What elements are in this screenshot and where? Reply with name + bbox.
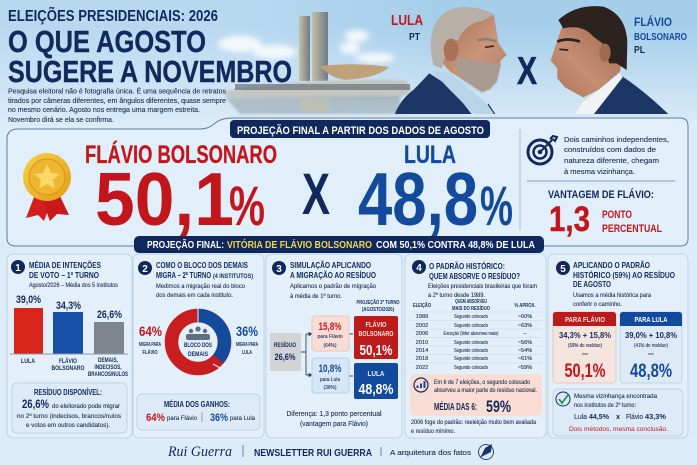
description: conferir o caminho. <box>573 301 622 308</box>
description: Usamos a média histórica para <box>573 292 651 299</box>
label: 64% to Flávio: FLÁVIO <box>142 349 158 356</box>
callout: average gains: 64% <box>146 412 165 424</box>
text: two paths: Dois caminhos independentes, <box>564 135 669 144</box>
label: 36% to Lula: MIGRA PARA <box>236 342 258 348</box>
icon: target <box>528 136 557 164</box>
callout: same neighbourhood <box>553 389 683 436</box>
card: para Lula <box>620 312 682 383</box>
intro text: Pesquisa eleitoral não é fotografia única. É uma sequência de retratos <box>8 86 226 96</box>
callout: available residual <box>12 383 127 433</box>
callout: six of seven: absorveu a maior parte do resíduo nacional. <box>434 387 537 394</box>
table: Segundo colocado <box>454 365 488 371</box>
result: Lula: LULA <box>404 141 456 169</box>
callout: same neighbourhood: 43,3% <box>645 412 666 421</box>
callout: available residual: e votos em outros candidatos). <box>26 422 110 429</box>
badge 4: 4 <box>416 263 422 274</box>
callout: same neighbourhood: Lula <box>574 412 588 421</box>
advantage: PONTO <box>602 209 632 221</box>
table: 1989 <box>416 314 428 320</box>
arrows <box>301 332 353 376</box>
callout: available residual: do eleitorado pode migrar <box>52 403 121 410</box>
footer: A arquitetura dos fatos <box>390 448 471 457</box>
badge 3: 3 <box>276 264 282 275</box>
footer: Rui Guerra <box>167 444 232 460</box>
intro text <box>8 86 226 124</box>
label: 36% to Lula: LULA <box>242 350 252 356</box>
table: ~59% <box>518 365 532 371</box>
banner: final projection: VITÓRIA DE FLÁVIO BOLSONARO <box>227 238 372 251</box>
box: Flávio result: FLÁVIO <box>366 320 387 329</box>
heading: DE VOTO – 1º TURNO <box>29 270 99 280</box>
callout: available residual: RESÍDUO DISPONÍVEL: <box>34 388 102 397</box>
callout: same neighbourhood: nos institutos de 2º turno: <box>574 402 636 409</box>
table <box>411 299 543 371</box>
box: Flávio result <box>354 316 398 359</box>
box: 15,8% to Flávio: 15,8% <box>318 321 342 333</box>
heading <box>290 260 376 280</box>
box: 15,8% to Flávio: para Flávio <box>318 334 342 340</box>
box: 10,8% to Lula: 10,8% <box>318 363 342 375</box>
result: Flávio Bolsonaro: 50,1 <box>95 157 234 241</box>
callout: same neighbourhood: 44,5% <box>589 412 609 421</box>
heading: A MIGRAÇÃO AO RESÍDUO <box>290 269 376 280</box>
heading: SIMULAÇÃO APLICANDO <box>290 260 371 270</box>
card: para Flávio: (59% do resíduo) <box>568 343 602 349</box>
description <box>428 283 537 299</box>
card: para Lula: PARA LULA <box>634 315 668 324</box>
donut chart: BLOCO DOS <box>184 342 212 349</box>
box: Lula result: LULA <box>368 369 385 378</box>
card: para Flávio: 34,3% + 15,8% <box>559 331 612 340</box>
donut chart: DEMAIS <box>188 351 209 358</box>
callout: six of seven <box>410 374 542 416</box>
label: Lula PT: LULA <box>391 12 423 29</box>
table: 2002 <box>416 323 428 329</box>
heading: MÉDIA DE INTENÇÕES <box>29 259 101 270</box>
description <box>573 292 651 308</box>
heading: COMO O BLOCO DOS DEMAIS <box>156 260 248 270</box>
table: ELEIÇÃO <box>413 302 431 309</box>
badge 1: 1 <box>15 263 21 274</box>
table: 2014 <box>416 348 428 354</box>
bar chart: 26,6% <box>97 309 122 321</box>
callout: same neighbourhood: x <box>616 412 621 421</box>
bar chart: 39,0% <box>16 294 41 306</box>
callout: six of seven: Em 6 de 7 eleições, o segundo colocado <box>434 379 530 386</box>
box: 10,8% to Lula: para Lula <box>320 377 341 383</box>
heading: APLICANDO O PADRÃO <box>573 260 650 270</box>
table: ~60% <box>518 314 532 320</box>
box: 15,8% to Flávio <box>312 316 349 351</box>
portrait: Flávio Bolsonaro <box>551 6 668 114</box>
title kicker: ELEIÇÕES PRESIDENCIAIS: 2026 <box>8 7 218 25</box>
intro text: no mesmo cenário. Agosto nos entrega uma margem estreita. <box>8 105 200 114</box>
heading <box>29 259 101 280</box>
badge 2: 2 <box>142 264 148 275</box>
card: para Flávio: 50,1% <box>564 361 606 382</box>
note: 2006 <box>411 419 536 435</box>
callout: same neighbourhood: Dois métodos, mesma conclusão. <box>569 426 668 433</box>
advantage <box>548 188 662 239</box>
column label: (AGOSTO/2026) <box>362 307 394 313</box>
bar chart: DEMAIS, <box>98 358 118 364</box>
advantage: VANTAGEM DE FLÁVIO: <box>548 188 654 201</box>
table: QUEM ABSORVEU <box>455 299 487 305</box>
table: MAIS DO RESÍDUO <box>452 304 490 312</box>
label: Flávio Bolsonaro PL: PL <box>634 45 645 56</box>
panel 2: block migration <box>133 254 264 438</box>
result: Flávio Bolsonaro: FLÁVIO BOLSONARO <box>85 140 277 169</box>
icon: gold medal <box>23 153 71 221</box>
description: Medimos a migração real do bloco <box>156 283 245 290</box>
description: Eleições presidenciais brasileiras que foram <box>428 283 537 290</box>
bar chart: BRANCOS/NULOS <box>88 372 128 378</box>
heading: O PADRÃO HISTÓRICO: <box>429 260 505 271</box>
label: 64% to Flávio <box>139 323 162 356</box>
table: – <box>523 331 527 337</box>
label: 64% to Flávio: 64% <box>139 323 162 339</box>
description <box>290 283 376 300</box>
heading: HISTÓRICO (59%) AO RESÍDUO <box>573 269 675 280</box>
column label: PROJEÇÃO 2º TURNO <box>356 299 400 306</box>
callout: same neighbourhood: Mesma vizinhança encontrada <box>574 393 657 400</box>
table: % APROX. <box>514 303 536 309</box>
badge 1 <box>11 260 25 274</box>
callout: average gains <box>137 394 260 430</box>
panel 1: first-round average <box>7 254 132 438</box>
bar chart: 34,3% <box>56 300 81 312</box>
difference note: (vantagem para Flávio) <box>300 421 368 428</box>
box: residual <box>270 333 301 371</box>
banner: final projection: COM 50,1% CONTRA 48,8% DE LULA <box>376 239 535 251</box>
versus X: X <box>302 162 330 227</box>
versus X: X <box>517 50 537 93</box>
advantage: PERCENTUAL <box>602 223 662 235</box>
callout: average gains: para Lula <box>230 415 255 422</box>
table: Segundo colocado <box>454 323 488 329</box>
badge 2 <box>138 261 152 275</box>
table: 2010 <box>416 340 428 346</box>
result: Flávio Bolsonaro: % <box>229 174 265 237</box>
badge 4 <box>412 260 426 274</box>
label: 36% to Lula: 36% <box>236 323 258 339</box>
description: dos demais em cada instituto. <box>156 292 233 299</box>
callout: average gains: MÉDIA DOS GANHOS: <box>164 400 230 409</box>
table: Segundo colocado <box>454 348 488 354</box>
box: Flávio result: BOLSONARO <box>358 329 394 338</box>
table: 2018 <box>416 356 428 362</box>
card: para Lula: 39,0% + 10,8% <box>625 331 678 340</box>
box: Lula result: 48,8% <box>358 381 394 398</box>
table: Segundo colocado <box>454 314 488 320</box>
banner: final projection <box>134 236 544 253</box>
callout: same neighbourhood: Flávio <box>626 412 643 421</box>
title: O QUE AGOSTO <box>8 24 206 59</box>
description: Aplicamos o padrão de migração <box>290 283 376 290</box>
badge 3 <box>272 261 286 275</box>
advantage: 1,3 <box>549 200 590 239</box>
card: para Lula: (41% do resíduo) <box>634 343 668 349</box>
panel 5: applying historical pattern <box>548 254 688 438</box>
heading: DE AGOSTO <box>573 279 611 289</box>
footer: NEWSLETTER RUI GUERRA <box>254 447 372 459</box>
text: two paths: construídos com dados de <box>564 145 656 154</box>
heading <box>573 260 675 289</box>
table: ~56% <box>518 340 532 346</box>
text: two paths: à mesma vizinhança. <box>564 167 635 176</box>
table: Segundo colocado <box>454 340 488 346</box>
box: 10,8% to Lula <box>312 358 349 393</box>
badge 5: 5 <box>560 264 566 275</box>
difference note: Diferença: 1,3 ponto percentual <box>286 411 382 418</box>
callout: average gains: 36% <box>210 412 228 424</box>
difference note <box>286 411 382 428</box>
icon: bar chart circle <box>414 378 428 392</box>
donut chart <box>172 308 224 370</box>
box: 10,8% to Lula: (36%) <box>324 385 337 391</box>
table: Segundo colocado <box>454 356 488 362</box>
callout: six of seven: 59% <box>486 397 511 416</box>
subtitle: Agosto/2026 – Média dos 5 institutos <box>29 283 118 289</box>
text: two paths: natureza diferente, chegam <box>564 156 659 165</box>
label: 36% to Lula <box>236 323 258 356</box>
card: para Flávio: PARA FLÁVIO <box>565 315 605 324</box>
intro text: tirados por câmeras diferentes, em ângulos diferentes, quase sempre <box>8 96 226 105</box>
table: ~54% <box>518 348 532 354</box>
card: para Flávio <box>553 312 616 383</box>
description: a 2º turno desde 1989. <box>428 292 485 299</box>
panel 3: simulation <box>266 254 402 438</box>
intro text: Novembro dirá se ela se confirma. <box>8 115 114 124</box>
table: Exceção (líder absorveu mais) <box>444 331 499 337</box>
result: Lula: % <box>480 174 513 237</box>
heading pill: projection: PROJEÇÃO FINAL A PARTIR DOS DADOS DE AGOSTO <box>237 124 484 137</box>
icon: people <box>186 326 210 340</box>
table: ~63% <box>518 323 532 329</box>
box: residual: 26,6% <box>274 352 296 363</box>
callout: average gains: para Flávio <box>167 415 197 422</box>
panel: final projection <box>7 118 688 246</box>
bar chart: INDECISOS, <box>94 365 122 371</box>
heading pill: projection <box>230 120 490 138</box>
heading <box>156 260 253 280</box>
text: two paths <box>564 135 669 176</box>
callout: six of seven: MÉDIA DAS 6: <box>434 400 477 413</box>
card: para Lula: 48,8% <box>630 361 672 382</box>
note: 2006: 2006 foge do padrão: reeleição muito bem avaliada <box>411 419 536 426</box>
bar chart: FLÁVIO <box>59 356 77 365</box>
result: Flávio Bolsonaro <box>85 140 277 241</box>
table: ~61% <box>518 356 532 362</box>
column label <box>356 299 400 313</box>
note: 2006: e resíduo mínimo. <box>411 428 455 435</box>
title <box>8 24 292 89</box>
description: à média de 1º turno. <box>290 293 342 300</box>
label: Flávio Bolsonaro PL <box>634 14 687 56</box>
footer <box>167 444 494 460</box>
callout: available residual: no 2º turno (indecisos, brancos/nulos <box>17 413 121 420</box>
icon: check <box>556 392 570 406</box>
label: 64% to Flávio: MIGRA PARA <box>139 342 161 348</box>
box: Lula result <box>354 363 398 399</box>
callout: available residual: 26,6% <box>22 399 49 411</box>
bar chart: LULA <box>21 358 35 365</box>
hero sky <box>0 0 697 126</box>
label: Lula PT: PT <box>409 32 420 43</box>
box: residual: RESÍDUO <box>274 341 296 349</box>
title: SUGERE A NOVEMBRO <box>8 54 292 89</box>
description <box>156 283 245 299</box>
box: 15,8% to Flávio: (64%) <box>324 343 337 349</box>
illustration: National Congress in Brasília <box>218 12 412 114</box>
heading <box>429 260 520 281</box>
table: 2006 <box>416 331 428 337</box>
bar chart <box>10 294 128 378</box>
label: Lula PT <box>391 12 423 43</box>
icon: pen <box>478 444 494 460</box>
result: Lula: 48,8 <box>358 157 478 241</box>
table: 2022 <box>416 365 428 371</box>
label: Flávio Bolsonaro PL: FLÁVIO <box>634 14 672 29</box>
portrait: Lula <box>395 7 507 114</box>
bar chart: BOLSONARO <box>52 365 84 372</box>
heading: (4 INSTITUTOS) <box>213 274 253 280</box>
heading: MIGRA – 2º TURNO <box>156 270 211 280</box>
heading: QUEM ABSORVE O RESÍDUO? <box>429 270 520 281</box>
banner: final projection: PROJEÇÃO FINAL: <box>147 238 224 251</box>
box: Flávio result: 50,1% <box>360 342 392 359</box>
panel 4: historical pattern <box>405 254 546 438</box>
badge 5 <box>556 261 570 275</box>
